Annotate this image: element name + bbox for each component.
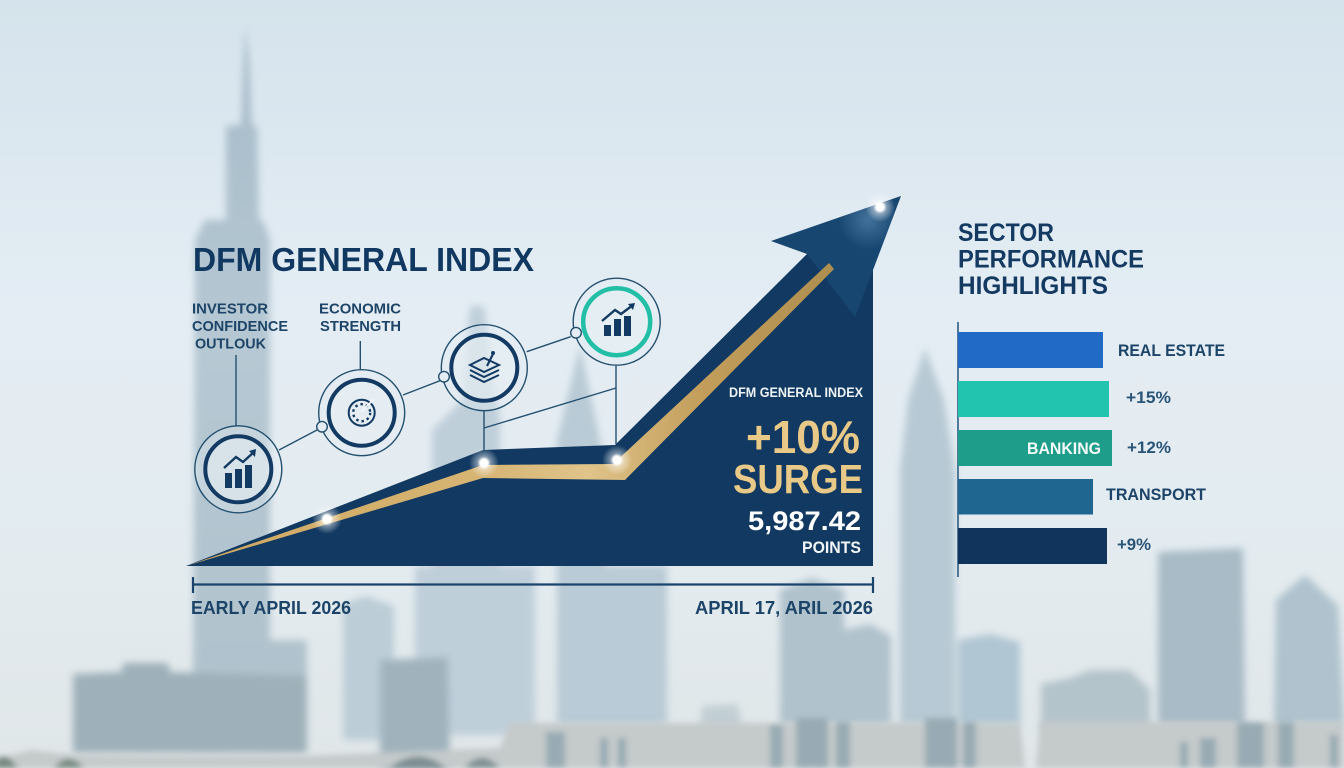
sector heading: PERFORMANCE (958, 246, 1144, 274)
start date: EARLY APRIL 2026 (191, 598, 351, 618)
headline callout on chart (729, 385, 863, 557)
milestone label: investor confidence outlook (192, 300, 288, 352)
connector nodes (317, 327, 581, 432)
index value: 5,987.42 (748, 506, 861, 536)
gold trend line (186, 263, 834, 566)
bar: banking (958, 430, 1171, 466)
sector heading: HIGHLIGHTS (958, 272, 1108, 300)
bar: banking: BANKING (1027, 439, 1101, 458)
bar: real estate (958, 332, 1225, 368)
milestone label: investor confidence outlook: CONFIDENCE (192, 318, 288, 335)
end date: APRIL 17, ARIL 2026 (695, 598, 873, 618)
milestone 1: growth chart icon (195, 426, 282, 513)
milestone label: economic strength (319, 300, 401, 335)
bar: banking: +12% (1127, 438, 1171, 457)
milestone label: investor confidence outlook: OUTLOUK (195, 336, 266, 352)
chart area (186, 254, 873, 566)
unit: POINTS (802, 538, 861, 557)
milestone 3: layers icon (441, 325, 527, 411)
bar: +15% (958, 381, 1171, 417)
milestone 2: gauge icon (319, 370, 405, 456)
glowing data points (312, 190, 898, 534)
milestone label: economic strength: STRENGTH (320, 318, 401, 335)
bar: +9% (958, 528, 1151, 564)
bar: transport: TRANSPORT (1106, 485, 1207, 504)
surge percentage: +10% (746, 411, 860, 463)
title: DFM GENERAL INDEX (193, 241, 534, 278)
connector lines between milestones (236, 337, 616, 450)
area chart with arrow (186, 190, 901, 566)
sector heading (958, 219, 1144, 300)
surge word: SURGE (733, 456, 863, 502)
timeline axis (191, 577, 873, 618)
bar: transport (958, 479, 1207, 514)
arrow head (771, 196, 901, 317)
bar: +15%: +15% (1126, 388, 1171, 407)
sector bar chart (958, 322, 1225, 577)
bar: +9%: +9% (1117, 535, 1151, 554)
bar: real estate: REAL ESTATE (1118, 341, 1225, 360)
milestone label: investor confidence outlook: INVESTOR (192, 300, 268, 318)
sector heading: SECTOR (958, 219, 1054, 247)
milestone 4: teal growth chart icon (573, 278, 660, 365)
milestone label: economic strength: ECONOMIC (319, 300, 401, 318)
callout label: DFM GENERAL INDEX (729, 385, 863, 400)
